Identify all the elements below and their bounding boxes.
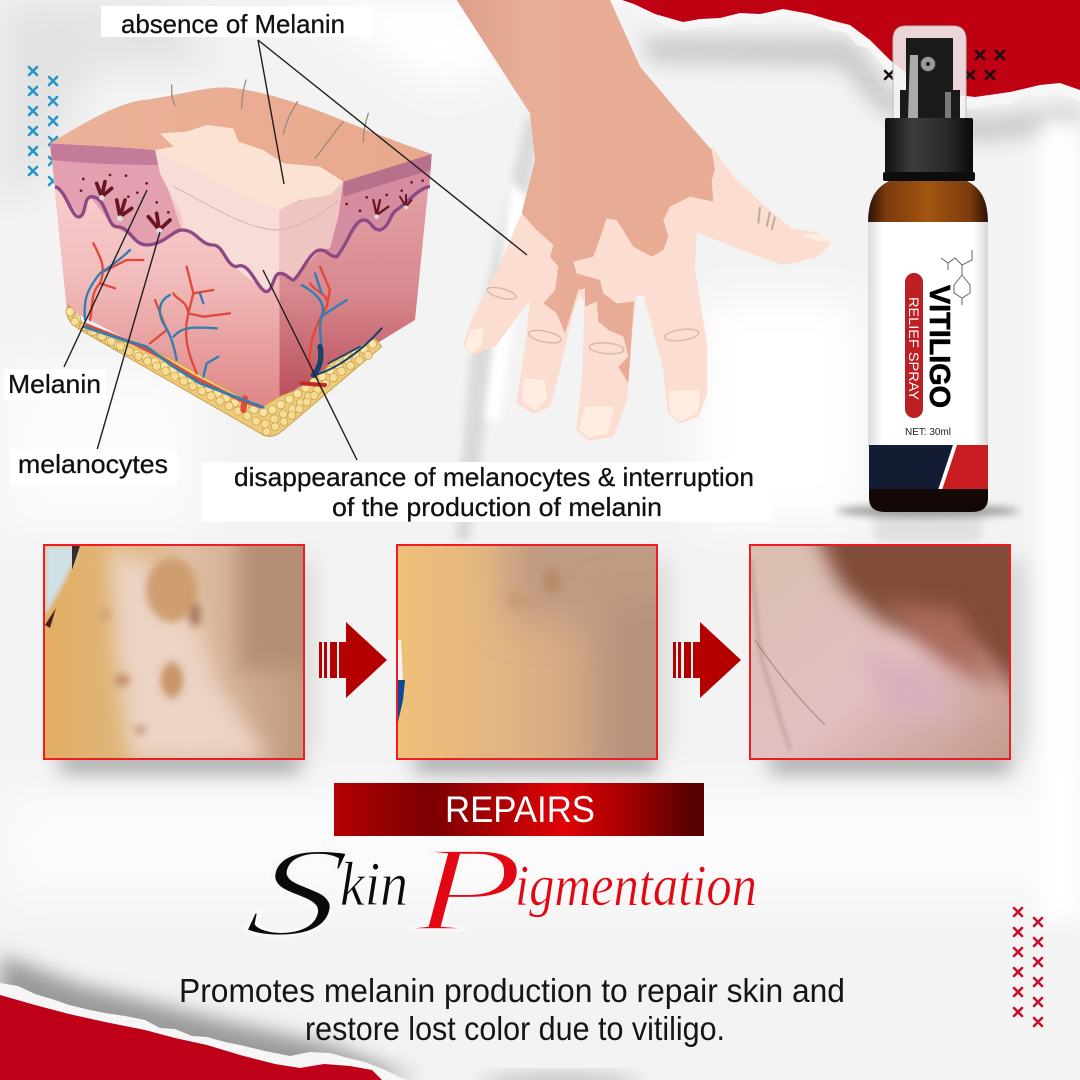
body copy: Promotes melanin production to repair skin and (179, 972, 845, 1009)
skin cross-section cube diagram (50, 80, 432, 436)
mauve epidermis band: left (50, 143, 182, 245)
navy label base (869, 445, 988, 490)
label: absence of Melanin: absence of Melanin (121, 9, 345, 39)
body copy: restore lost color due to vitiligo. (305, 1010, 725, 1047)
script title: Skin Pigmentation: P (410, 822, 524, 957)
molecule icon (941, 250, 972, 305)
knuckle wrinkles (486, 207, 775, 355)
script title: Skin Pigmentation (236, 821, 757, 963)
before photo (43, 544, 305, 760)
RELIEF SPRAY: RELIEF SPRAY (906, 297, 922, 401)
bottle shadow (836, 505, 1020, 517)
photo shadows (60, 560, 1022, 772)
torn red paper: bottom left (0, 983, 406, 1080)
pale depigmented section (155, 150, 279, 292)
bottle reflection (872, 514, 984, 542)
mauve epidermis band: right (320, 154, 432, 257)
black collar (885, 118, 973, 174)
label: melanocytes: melanocytes (18, 449, 168, 479)
right face (279, 154, 432, 398)
script title: Skin Pigmentation: igmentation (515, 853, 757, 918)
red pill on label (905, 273, 923, 418)
script title: Skin Pigmentation: kin (340, 851, 408, 919)
blood vessels: arteries (87, 243, 330, 410)
decorative black crosses on red paper (885, 51, 1004, 79)
torn red paper: top right (608, 0, 1080, 109)
pigmented hand and wrist (457, 0, 715, 383)
after photo (749, 544, 1011, 760)
left face (50, 143, 279, 410)
red stripe (942, 445, 988, 490)
decorative red crosses (1014, 908, 1042, 1026)
blood vessels: veins (83, 250, 382, 407)
label: disappearance of melanocytes: disappearance of melanocytes & interruption (234, 462, 754, 492)
top surface (50, 87, 432, 210)
bottle base (869, 489, 988, 512)
depigmented patch on top (155, 125, 343, 210)
leader lines (64, 40, 527, 460)
spray bottle product (836, 26, 1020, 542)
purple wavy junction line (55, 187, 430, 292)
hand base pale skin (465, 150, 828, 439)
net volume: NET: 30ml (905, 427, 951, 438)
label: disappearance of melanocytes (202, 462, 772, 522)
arrow 2 (673, 622, 741, 698)
white label (868, 222, 988, 446)
REPAIRS banner: REPAIRS (445, 789, 595, 830)
decorative blue crosses (29, 67, 57, 185)
fingernails (467, 235, 826, 436)
mid-treatment photo (396, 544, 658, 760)
amber glass shoulder (868, 181, 988, 224)
product name VITILIGO: VITILIGO (923, 285, 955, 408)
script title: Skin Pigmentation: S (236, 821, 358, 963)
arrow 1 (319, 622, 387, 698)
label: Melanin: Melanin (8, 369, 101, 399)
REPAIRS banner (334, 783, 704, 836)
hairs (172, 80, 368, 158)
melanocyte cells (97, 182, 412, 230)
body copy (179, 972, 845, 1047)
fat layer (67, 305, 382, 436)
spray nozzle (900, 38, 960, 122)
clear cap (893, 26, 966, 125)
hand illustration with vitiligo patches (457, 0, 828, 439)
label: disappearance of melanocytes: of the production of melanin (332, 492, 662, 522)
